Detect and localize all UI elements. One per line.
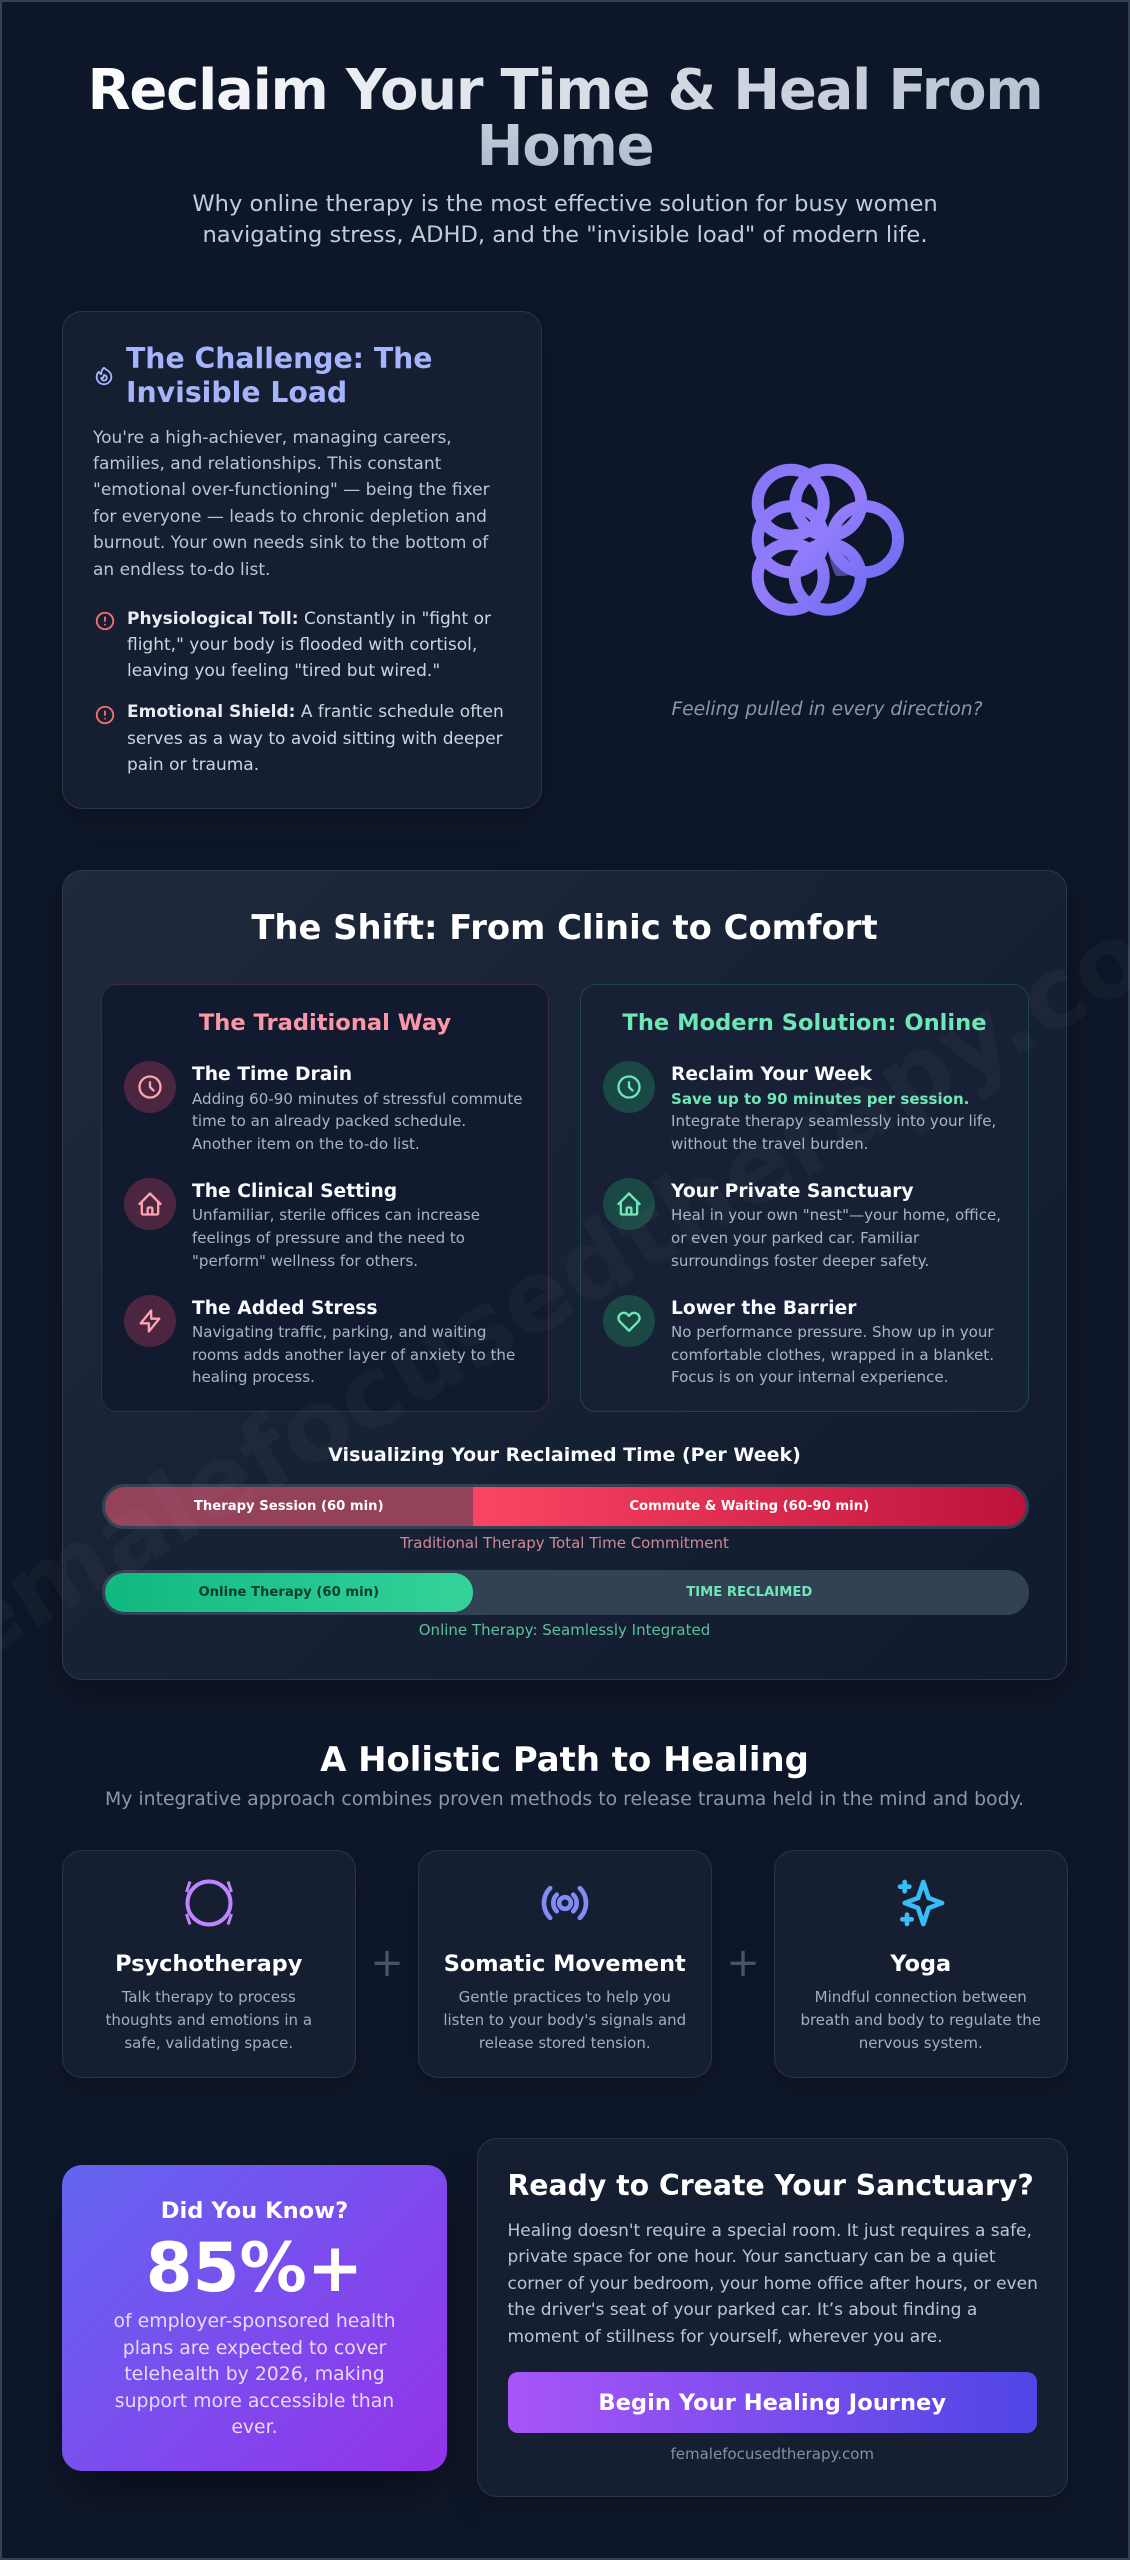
button: begin journey: Begin Your Healing Journey [598,2390,946,2416]
text: ready description: corner of your bedroom, your home office after hours, or even [508,2274,1038,2294]
subtitle: Why online therapy is the most effective solution for busy women [192,191,938,217]
text: physiological toll [127,609,491,681]
caption: traditional: Traditional Therapy Total Time Commitment [400,1534,729,1552]
panel: ready call to action [477,2138,1068,2497]
text: somatic movement: listen to your body's signals and [443,2011,686,2029]
text: ready description: the driver's seat of your parked car. It’s about finding a [508,2300,977,2320]
title: yoga: Yoga [890,1951,951,1977]
bar chart: online therapy [102,1570,1029,1615]
text: somatic movement: Gentle practices to help you [459,1988,671,2006]
icon: clock [124,1061,176,1113]
item title: reclaim week: Reclaim Your Week [671,1064,872,1085]
text: psychotherapy [105,1988,312,2052]
text: ready description: Healing doesn't require a special room. It just requires a safe, [508,2221,1032,2241]
item text: clinical setting: Unfamiliar, sterile offices can increase [192,1206,480,1224]
item title: private sanctuary: Your Private Sanctuary [671,1181,914,1202]
heading: the challenge: Invisible Load [126,376,347,409]
panel: psychotherapy [62,1850,356,2078]
text: stat description: ever. [231,2417,278,2438]
heading: modern solution: The Modern Solution: Online [622,1010,987,1036]
panel: traditional way [101,984,549,1412]
bar segment: online therapy: Online Therapy (60 min) [198,1585,379,1600]
icon: heart [603,1295,655,1347]
icon: alert emotional [96,706,114,724]
item text: added stress: healing process. [192,1368,315,1386]
text: psychotherapy: Talk therapy to process [122,1988,296,2006]
icon: somatic signal [542,1886,588,1920]
text: ready description: moment of stillness for yourself, wherever you are. [508,2327,943,2347]
item text: lower barrier: No performance pressure. Show up in your [671,1323,994,1341]
title: somatic movement: Somatic Movement [444,1951,686,1977]
icon: clock [603,1061,655,1113]
item text: lower barrier: Focus is on your internal experience. [671,1368,948,1386]
item title: time drain: The Time Drain [192,1064,352,1085]
text: psychotherapy: safe, validating space. [124,2034,293,2052]
text: stat description: plans are expected to cover [123,2338,386,2359]
item text: clinical setting: "perform" wellness for others. [192,1252,418,1270]
icon: home [124,1178,176,1230]
heading: ready: Ready to Create Your Sanctuary? [508,2169,1034,2202]
icon: tangled flower [752,464,904,616]
item title: lower barrier: Lower the Barrier [671,1298,856,1319]
title [62,63,1068,176]
text: somatic movement [443,1988,686,2052]
subheading: holistic path: My integrative approach combines proven methods to release trauma held in the mind and body. [105,1789,1024,1810]
item text: private sanctuary: Heal in your own "nest"—your home, office, [671,1206,1001,1224]
text: ready description: private space for one hour. Your sanctuary can be a quiet [508,2247,996,2267]
text: yoga [800,1988,1041,2052]
heading: the shift: The Shift: From Clinic to Comfort [251,908,878,947]
item text: time drain [192,1090,522,1153]
item text: lower barrier: comfortable clothes, wrapped in a blanket. [671,1346,994,1364]
text: challenge description: an endless to-do list. [93,560,270,580]
caption: feeling pulled: Feeling pulled in every direction? [671,699,983,720]
bar segment: therapy session: Therapy Session (60 min) [194,1498,384,1514]
panel: modern solution [580,984,1029,1412]
icon: sparkles [898,1880,944,1926]
bar chart: traditional therapy [102,1484,1029,1528]
item text: time drain: Adding 60-90 minutes of stressful commute [192,1090,522,1108]
text: physiological toll: Physiological Toll: Constantly in "fight or [127,609,491,629]
panel: did you know [62,2165,447,2471]
subtitle: navigating stress, ADHD, and the "invisible load" of modern life. [202,222,928,248]
icon: plus one: + [370,1940,404,1986]
heading: traditional: The Traditional Way [199,1010,451,1036]
text: emotional shield [127,702,504,775]
text: challenge description [93,428,490,580]
caption: online: Online Therapy: Seamlessly Integrated [419,1621,710,1639]
item title: clinical setting: The Clinical Setting [192,1181,397,1202]
icon: psychotherapy ring [185,1880,233,1926]
panel: the shift [62,870,1067,1680]
text: challenge description: You're a high-achiever, managing careers, [93,428,452,448]
title: psychotherapy: Psychotherapy [115,1951,302,1977]
item text: reclaim week: without the travel burden. [671,1135,868,1153]
text: physiological toll: flight," your body is flooded with cortisol, [127,635,477,655]
panel: the challenge [62,311,542,809]
text: physiological toll: leaving you feeling "tired but wired." [127,661,440,681]
text: ready description [508,2221,1038,2347]
text: yoga: nervous system. [859,2034,983,2052]
item text: reclaim week: Save up to 90 minutes per session. [671,1090,969,1108]
bar segment: commute and waiting: Commute & Waiting (60-90 min) [629,1498,869,1514]
panel: somatic movement [418,1850,712,2078]
heading: holistic path: A Holistic Path to Healing [320,1740,809,1779]
item text: private sanctuary: or even your parked car. Familiar [671,1229,919,1247]
bar segment: time reclaimed: TIME RECLAIMED [686,1585,812,1600]
item text: private sanctuary [671,1206,1001,1270]
item text: added stress: Navigating traffic, parking, and waiting [192,1323,486,1341]
icon: plus two: + [726,1940,760,1986]
bar segment: online therapy [105,1573,472,1612]
heading: visualizing time: Visualizing Your Reclaimed Time (Per Week) [328,1444,801,1466]
text: emotional shield: Emotional Shield: A frantic schedule often [127,702,504,722]
item text: lower barrier [671,1323,994,1386]
item text: reclaim week [671,1090,996,1153]
icon: lightning [124,1295,176,1347]
bar segment: commute and waiting [472,1486,1026,1526]
panel: yoga [774,1850,1068,2078]
icon: home [603,1178,655,1230]
item text: added stress: rooms adds another layer of anxiety to the [192,1346,515,1364]
item text: time drain: Another item on the to-do list. [192,1135,420,1153]
text: somatic movement: release stored tension. [479,2034,651,2052]
text: challenge description: families, and relationships. This constant [93,454,441,474]
text: challenge description: for everyone — leads to chronic depletion and [93,507,487,527]
item text: time drain: time to an already packed schedule. [192,1112,466,1130]
item text: private sanctuary: surroundings foster deeper safety. [671,1252,929,1270]
item text: clinical setting [192,1206,480,1270]
text: emotional shield: pain or trauma. [127,755,259,775]
icon: flame [96,366,112,386]
button: begin journey [508,2372,1037,2433]
item text: clinical setting: feelings of pressure and the need to [192,1229,465,1247]
text: website: femalefocusedtherapy.com [670,2445,874,2463]
bar segment: therapy session [105,1486,472,1526]
icon: alert physiological [96,612,114,630]
subtitle [192,191,938,248]
stat: 85 percent: 85%+ [146,2228,363,2306]
text: stat description: telehealth by 2026, making [124,2364,385,2385]
text: yoga: breath and body to regulate the [800,2011,1041,2029]
text: stat description: of employer-sponsored health [113,2311,396,2332]
text: psychotherapy: thoughts and emotions in a [105,2011,312,2029]
text: yoga: Mindful connection between [815,1988,1027,2006]
heading: the challenge: The Challenge: The [126,342,432,375]
item title: added stress: The Added Stress [192,1298,378,1319]
heading: the challenge [126,342,432,409]
text: emotional shield: serves as a way to avoid sitting with deeper [127,729,503,749]
text: challenge description: burnout. Your own needs sink to the bottom of [93,533,488,553]
label: did you know: Did You Know? [161,2198,348,2224]
item text: added stress [192,1323,515,1386]
item text: reclaim week: Integrate therapy seamlessly into your life, [671,1112,996,1130]
text: stat description [113,2311,396,2438]
text: challenge description: "emotional over-functioning" — being the fixer [93,480,490,500]
text: stat description: support more accessible than [115,2391,394,2412]
